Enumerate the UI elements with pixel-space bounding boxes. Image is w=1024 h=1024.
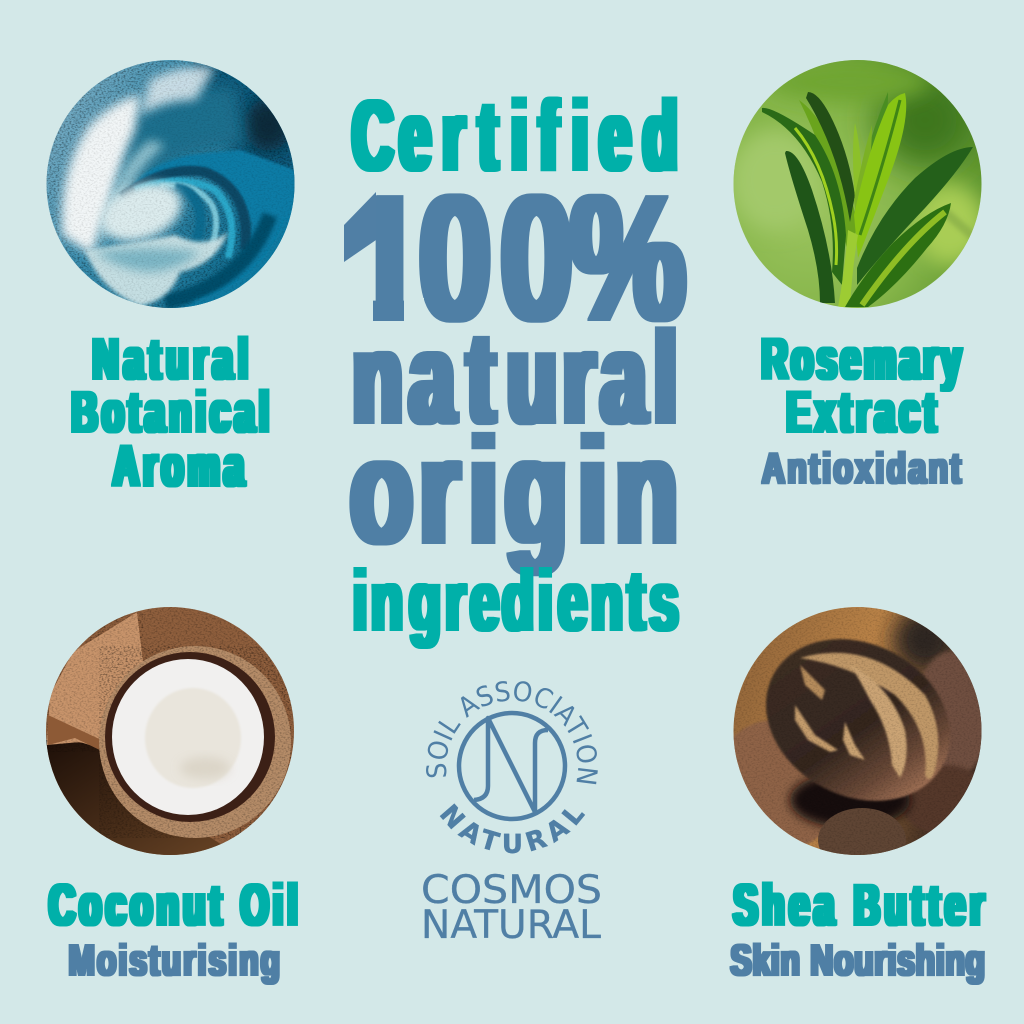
label: Coconut Oil Moisturising <box>49 873 297 985</box>
label: Shea Butter Skin Nourishing <box>730 873 985 985</box>
heading: Certified: Certified <box>352 81 677 192</box>
heading: origin: origin <box>350 407 678 576</box>
logo text: COSMOS NATURAL: NATURAL <box>421 903 601 948</box>
image: shea nuts <box>734 607 982 855</box>
heading: natural: natural <box>353 305 677 452</box>
label: Natural Botanical Aroma: Aroma <box>113 434 245 499</box>
label: Natural Botanical Aroma: Botanical <box>72 380 269 445</box>
label: Natural Botanical Aroma <box>72 327 269 499</box>
logo text: COSMOS NATURAL: COSMOS <box>421 868 602 913</box>
heading: 100%: 100% <box>350 158 686 359</box>
label: Rosemary Extract Antioxidant: Antioxidant <box>762 444 961 493</box>
label: Shea Butter Skin Nourishing: Shea Butter <box>734 873 984 938</box>
label: Rosemary Extract Antioxidant: Rosemary <box>762 327 961 392</box>
label: Rosemary Extract Antioxidant <box>762 327 961 493</box>
logo text: COSMOS NATURAL <box>421 868 602 948</box>
label: Natural Botanical Aroma: Natural <box>93 327 248 392</box>
label: Shea Butter Skin Nourishing: Skin Nourishing <box>730 936 985 985</box>
logo: Soil Association Natural seal: SOIL ASSOCIATION <box>426 681 598 784</box>
image: halved coconut <box>46 607 295 856</box>
label: Coconut Oil Moisturising: Coconut Oil <box>49 873 297 938</box>
logo: Soil Association Natural seal: NATURAL <box>440 804 586 854</box>
label: Coconut Oil Moisturising: Moisturising <box>68 936 280 985</box>
logo: Soil Association Natural seal <box>426 681 598 854</box>
image: rosemary sprig <box>730 60 985 309</box>
label: Rosemary Extract Antioxidant: Extract <box>787 380 936 445</box>
heading: ingredients: ingredients <box>353 553 679 648</box>
image: ocean wave <box>46 60 295 310</box>
